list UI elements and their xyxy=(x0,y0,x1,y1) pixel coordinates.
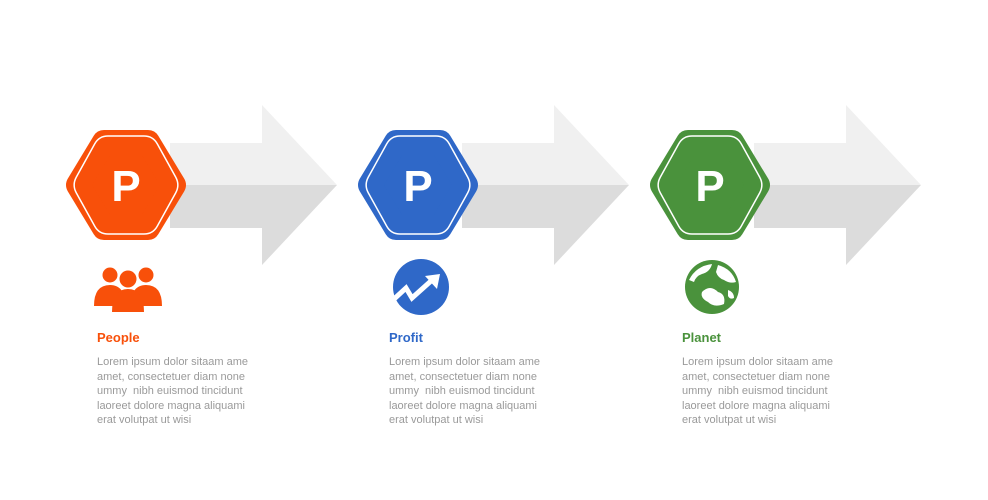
title: people: People xyxy=(97,330,140,345)
text: profit: erat volutpat ut wisi xyxy=(389,414,483,426)
hexagon 2 xyxy=(366,136,470,234)
step 1: people xyxy=(74,105,337,312)
icon: globe xyxy=(685,260,739,314)
text: people: erat volutpat ut wisi xyxy=(97,414,191,426)
text: profit: laoreet dolore magna aliquami xyxy=(389,400,537,412)
step 3: planet xyxy=(658,105,921,314)
text: people: ummy nibh euismod tincidunt xyxy=(97,385,243,397)
arrow 3 xyxy=(754,105,921,265)
text: planet: laoreet dolore magna aliquami xyxy=(682,400,830,412)
text: planet: Lorem ipsum dolor sitaam ame xyxy=(682,356,833,368)
text: people xyxy=(97,356,248,426)
text: profit: ummy nibh euismod tincidunt xyxy=(389,385,535,397)
hexagon 1 xyxy=(74,136,178,234)
text: people: laoreet dolore magna aliquami xyxy=(97,400,245,412)
text: planet: erat volutpat ut wisi xyxy=(682,414,776,426)
text: people: Lorem ipsum dolor sitaam ame xyxy=(97,356,248,368)
text: profit: amet, consectetuer diam none xyxy=(389,371,537,383)
text: profit xyxy=(389,356,540,426)
arrow 2 xyxy=(462,105,629,265)
text: people: amet, consectetuer diam none xyxy=(97,371,245,383)
title: planet: Planet xyxy=(682,330,721,345)
hexagon 3 xyxy=(658,136,762,234)
text: planet: amet, consectetuer diam none xyxy=(682,371,830,383)
text: profit: Lorem ipsum dolor sitaam ame xyxy=(389,356,540,368)
step 2: profit xyxy=(366,105,629,315)
title: profit: Profit xyxy=(389,330,423,345)
icon: growth chart xyxy=(393,259,449,315)
icon: people xyxy=(94,268,162,312)
arrow 1 xyxy=(170,105,337,265)
text: planet: ummy nibh euismod tincidunt xyxy=(682,385,828,397)
text: planet xyxy=(682,356,833,426)
